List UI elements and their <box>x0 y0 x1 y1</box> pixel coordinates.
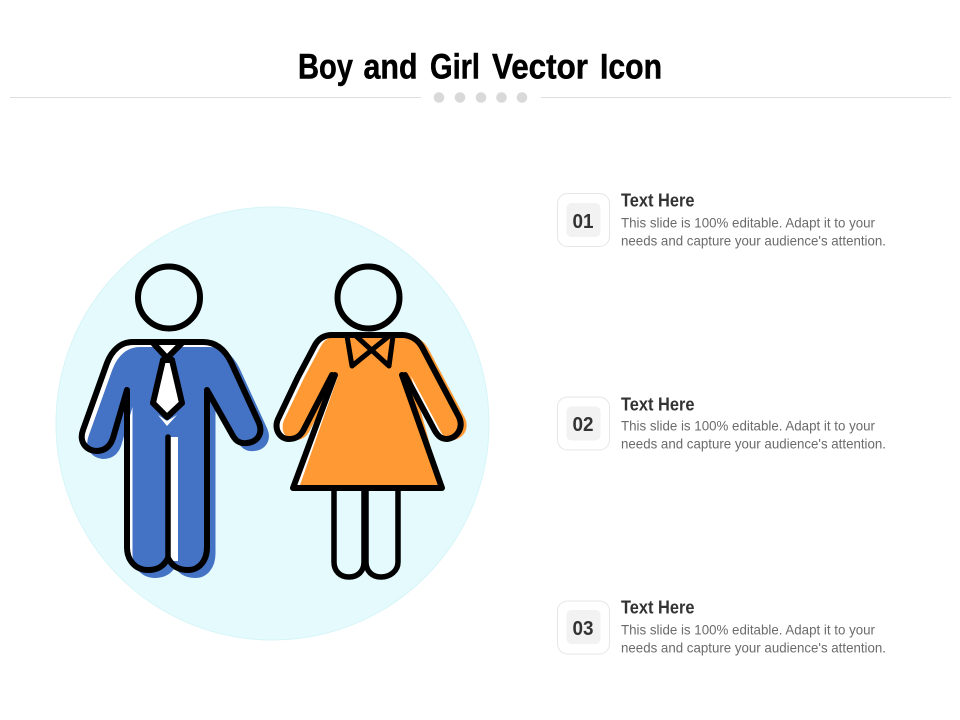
item 02: 02 <box>572 414 594 436</box>
boy collar lines <box>153 343 182 358</box>
number badge 03 <box>558 601 610 654</box>
item 01: 01 <box>572 211 594 233</box>
girl orange dress <box>283 336 467 488</box>
heading 03: Text Here <box>621 598 694 618</box>
item 03: needs and capture your audience's attention. <box>621 640 886 656</box>
girl head <box>338 266 400 328</box>
girl white underlay <box>277 335 461 488</box>
boy outline <box>82 342 260 570</box>
girl outline <box>277 335 461 439</box>
description 03: This slide is 100% editable. Adapt it to your <box>621 622 875 638</box>
number badge 02 <box>558 397 610 450</box>
icon: girl <box>277 266 467 577</box>
girl legs <box>334 489 398 577</box>
background circle <box>56 207 489 640</box>
boy blue suit <box>89 348 267 576</box>
boy leg gap <box>168 437 178 561</box>
boy shirt collar <box>153 343 182 358</box>
icon: boy <box>82 266 267 576</box>
title divider with dots <box>10 92 951 103</box>
title <box>298 48 662 86</box>
boy white underlay <box>82 342 260 570</box>
title: Boy <box>298 48 353 86</box>
title: Icon <box>600 48 662 86</box>
title: Girl <box>430 48 480 86</box>
item 01: needs and capture your audience's attention. <box>621 232 886 248</box>
item 02 <box>558 394 886 452</box>
item 02: needs and capture your audience's attention. <box>621 436 886 452</box>
boy tie shadow <box>158 415 177 426</box>
heading 02: Text Here <box>621 394 694 414</box>
heading 01: Text Here <box>621 190 694 210</box>
item 03: 03 <box>572 618 594 640</box>
description 02: This slide is 100% editable. Adapt it to your <box>621 418 875 434</box>
boy head <box>138 266 200 328</box>
title: Vector <box>492 48 588 86</box>
title: and <box>364 48 418 86</box>
boy tie <box>153 360 182 417</box>
item 01 <box>558 190 886 248</box>
description 01: This slide is 100% editable. Adapt it to your <box>621 214 875 230</box>
item 03 <box>558 598 886 656</box>
number badge 01 <box>558 194 610 246</box>
girl dress sides and hem <box>293 375 442 488</box>
boy leg line <box>165 437 171 558</box>
girl collar <box>347 336 393 366</box>
